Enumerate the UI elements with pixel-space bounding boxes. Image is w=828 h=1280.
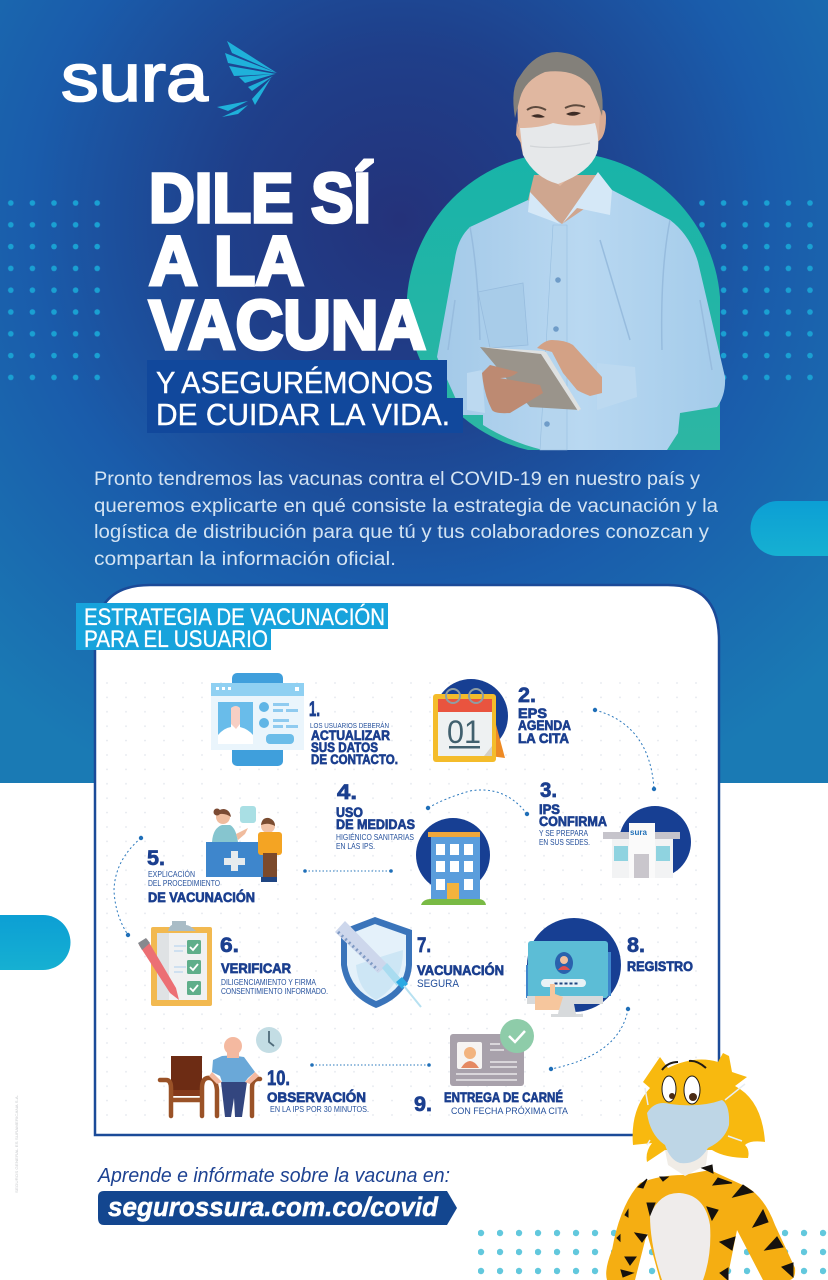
subheadline line 2: DE CUIDAR LA VIDA. — [156, 397, 450, 432]
step 8 text: 8. — [627, 934, 645, 957]
left cuff — [467, 370, 485, 413]
head — [518, 62, 600, 186]
icon: calendar: 01 — [447, 714, 481, 750]
section heading — [76, 603, 388, 653]
decorative pill left — [0, 915, 70, 970]
step 10 text: 10. — [267, 1067, 290, 1090]
step 1 text: DE CONTACTO. — [311, 752, 398, 767]
icon: contact profile — [211, 673, 304, 766]
arrow: step 3 to 4 — [426, 790, 529, 816]
step 7 text: VACUNACIÓN — [417, 963, 504, 978]
intro paragraph: compartan la información oficial. — [94, 549, 396, 570]
icon: clinic building — [603, 806, 691, 878]
headline line 3: VACUNA — [149, 286, 426, 364]
dot pattern left — [0, 192, 108, 388]
step 7 — [335, 917, 504, 1008]
shirt — [437, 190, 725, 450]
step 3 text — [539, 779, 607, 847]
belly — [650, 1193, 710, 1280]
step 4 — [336, 781, 490, 905]
heading line 1: ESTRATEGIA DE VACUNACIÓN — [84, 604, 385, 631]
step 6 text: 6. — [220, 934, 239, 957]
heading band — [76, 603, 388, 650]
step 10 — [160, 1027, 369, 1117]
placket and buttons — [540, 225, 567, 450]
step 1 text: 1. — [309, 698, 320, 721]
icon: shield with syringe — [335, 917, 421, 1008]
step 3 — [539, 779, 691, 878]
dot pattern right — [691, 192, 828, 388]
step 10 text: EN LA IPS POR 30 MINUTOS. — [270, 1105, 369, 1114]
subheadline — [147, 360, 463, 433]
heading line 2: PARA EL USUARIO — [84, 626, 268, 653]
step 3 text: Y SE PREPARA — [539, 829, 589, 838]
headline — [149, 159, 426, 364]
tiger stripes — [617, 1165, 793, 1280]
icon: clinic building: sura — [630, 828, 647, 837]
step 4 text: 4. — [337, 781, 357, 804]
step 7 text: 7. — [417, 934, 431, 957]
right cuff — [597, 363, 637, 410]
step 5 text: 5. — [147, 847, 165, 870]
head — [633, 1053, 765, 1162]
step 1 — [211, 673, 398, 767]
mascot: tiger with mask — [606, 1053, 795, 1280]
dotted grid — [103, 680, 711, 1128]
intro paragraph: queremos explicarte en qué consiste la estrategia de vacunación y la — [94, 496, 718, 517]
step 5 text — [147, 847, 255, 905]
step 4 text: DE MEDIDAS — [336, 817, 415, 832]
arrow: step 9 to 10 — [310, 1063, 431, 1067]
step 9 text — [414, 1090, 569, 1117]
step 1 text: SUS DATOS — [311, 740, 378, 755]
step 10 text: OBSERVACIÓN — [267, 1090, 366, 1105]
decorative pill right — [750, 501, 828, 556]
step 5 text: EXPLICACIÓN — [148, 870, 195, 879]
step 6 text: DILIGENCIAMIENTO Y FIRMA — [221, 978, 317, 987]
collar — [528, 172, 612, 224]
legal text: SEGUROS GENERAL ES SURAMERICANA S.A. — [14, 1095, 19, 1193]
step 1 text: ACTUALIZAR — [311, 728, 390, 743]
arrow: step 4 to 5 — [303, 869, 393, 873]
face mask — [520, 123, 598, 184]
intro paragraph: logística de distribución para que tú y tus colaboradores conozcan y — [94, 522, 710, 543]
step 4 text: HIGIÉNICO SANITARIAS — [336, 833, 414, 842]
step 6 text — [220, 934, 328, 996]
icon: seated person and clock — [160, 1027, 282, 1117]
step 2 text — [518, 684, 571, 746]
step 5 — [147, 806, 282, 905]
step 5 text: DE VACUNACIÓN — [148, 890, 255, 905]
step 2 text: AGENDA — [518, 718, 571, 733]
background: blue gradient header — [0, 0, 828, 783]
hair — [513, 52, 603, 118]
arrow: step 8 to 9 — [549, 1007, 630, 1071]
step 6 — [138, 921, 328, 1006]
white panel: strategy — [95, 585, 719, 1135]
step 3 text: CONFIRMA — [539, 814, 607, 829]
icon: reception desk — [206, 806, 282, 882]
panel card — [95, 585, 719, 1135]
logo wing — [217, 41, 277, 117]
teal arch behind man — [407, 153, 720, 450]
step 8 text: REGISTRO — [627, 959, 693, 974]
step 6 text: VERIFICAR — [221, 961, 291, 976]
headline line 1: DILE SÍ — [149, 159, 372, 237]
intro paragraph — [94, 469, 718, 570]
step 2 text: EPS — [518, 706, 547, 721]
step 4 text: EN LAS IPS. — [336, 842, 375, 851]
arrow: step 5 to 6 — [114, 836, 143, 937]
icon: vaccination card — [450, 1019, 534, 1086]
arrow: step 2 to 3 — [593, 708, 656, 791]
left hand — [482, 365, 543, 413]
tablet — [480, 347, 580, 410]
eyes — [527, 105, 585, 110]
ears — [516, 110, 606, 145]
step 2 text: 2. — [518, 684, 536, 707]
step 9 text: 9. — [414, 1093, 432, 1116]
intro paragraph: Pronto tendremos las vacunas contra el COVID-19 en nuestro país y — [94, 469, 701, 490]
step 3 text: EN SUS SEDES. — [539, 838, 590, 847]
step 9 text: ENTREGA DE CARNÉ — [444, 1090, 563, 1105]
chin fur — [665, 1150, 708, 1176]
step 3 text: 3. — [540, 779, 557, 802]
headline line 2: A LA — [149, 222, 304, 300]
step 3 text: IPS — [539, 802, 560, 817]
step 10 text — [267, 1067, 369, 1114]
brows and eyes — [662, 1061, 706, 1070]
step 1 text: LOS USUARIOS DEBERÁN — [310, 721, 389, 730]
subheadline line 1: Y ASEGURÉMONOS — [156, 365, 433, 400]
step 1 text — [309, 698, 398, 767]
step 7 text: SEGURA — [417, 978, 460, 990]
website prompt: Aprende e infórmate sobre la vacuna en: — [97, 1165, 450, 1187]
step 4 text: USO — [336, 805, 363, 820]
logo: SURA — [61, 40, 277, 117]
mascot face mask — [647, 1100, 729, 1163]
step 7 text — [417, 934, 504, 990]
step 2 text: LA CITA — [518, 731, 569, 746]
photo: man with mask and tablet — [437, 52, 725, 450]
step 2 — [433, 679, 571, 762]
arms and body — [606, 1170, 795, 1280]
neck — [528, 175, 612, 226]
step 9 — [414, 1019, 569, 1117]
shirt pocket — [478, 283, 528, 348]
step 8 text — [627, 934, 693, 974]
icon: monitor login — [526, 918, 621, 1017]
logo wordmark: sura — [61, 40, 208, 116]
step 4 text — [336, 781, 415, 851]
bottom dot pattern — [478, 1223, 828, 1280]
sleeve seams and folds — [448, 220, 712, 370]
step 5 text: DEL PROCEDIMIENTO — [148, 879, 220, 888]
right hand — [537, 340, 602, 396]
step 8 — [526, 918, 693, 1017]
step 6 text: CONSENTIMIENTO INFORMADO. — [221, 987, 328, 996]
icon: hospital tower — [416, 818, 490, 905]
subheadline band — [147, 360, 463, 433]
step 9 text: CON FECHA PRÓXIMA CITA — [451, 1106, 569, 1117]
website badge: segurossura.com.co/covid — [108, 1192, 438, 1222]
icon: clipboard with pencil — [138, 921, 212, 1006]
